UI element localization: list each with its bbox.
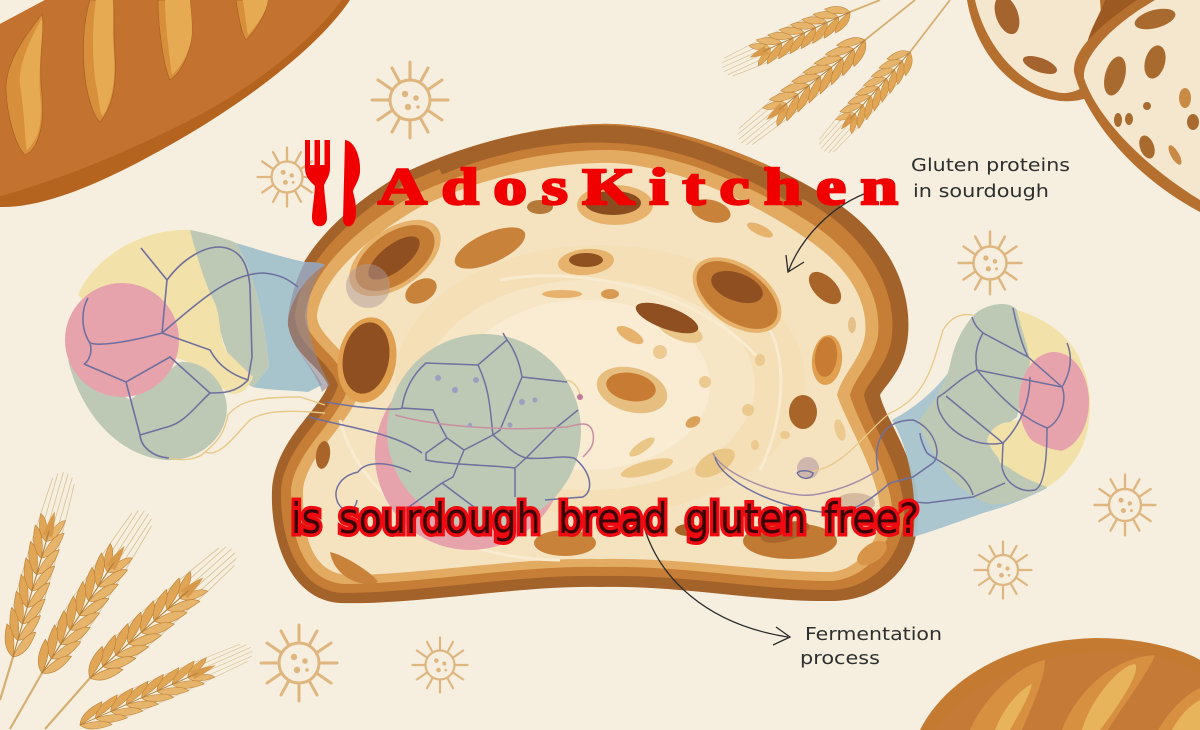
wheat top right [718,0,950,158]
baguette bottom right [920,638,1200,730]
crust [272,118,919,603]
bread slice [272,118,919,603]
label: fermentation process: Fermentation [805,624,942,645]
gluten network circle center [309,333,593,550]
baguette top left [0,0,350,207]
label: gluten proteins: in sourdough [913,181,1049,202]
icon: fork and knife [305,140,360,226]
crumb holes [302,185,891,584]
label: fermentation process [800,624,942,669]
subtitle: is sourdough bread gluten free? [291,494,919,543]
translucent pocket on crust [346,264,390,308]
bread slices top right [967,0,1200,212]
crumb swirl [340,245,805,560]
crumb [303,163,880,575]
title: AdosKitchen [378,158,898,216]
label: gluten proteins: Gluten proteins [911,155,1070,176]
arrow: fermentation [641,515,790,645]
label: gluten proteins [911,155,1070,202]
label: fermentation process: process [800,648,880,669]
gluten network blob right [713,304,1090,537]
arrow: gluten proteins [786,191,872,272]
germ icons [258,62,1155,701]
gluten network blob left [65,230,330,460]
wheat bottom left [0,469,257,730]
